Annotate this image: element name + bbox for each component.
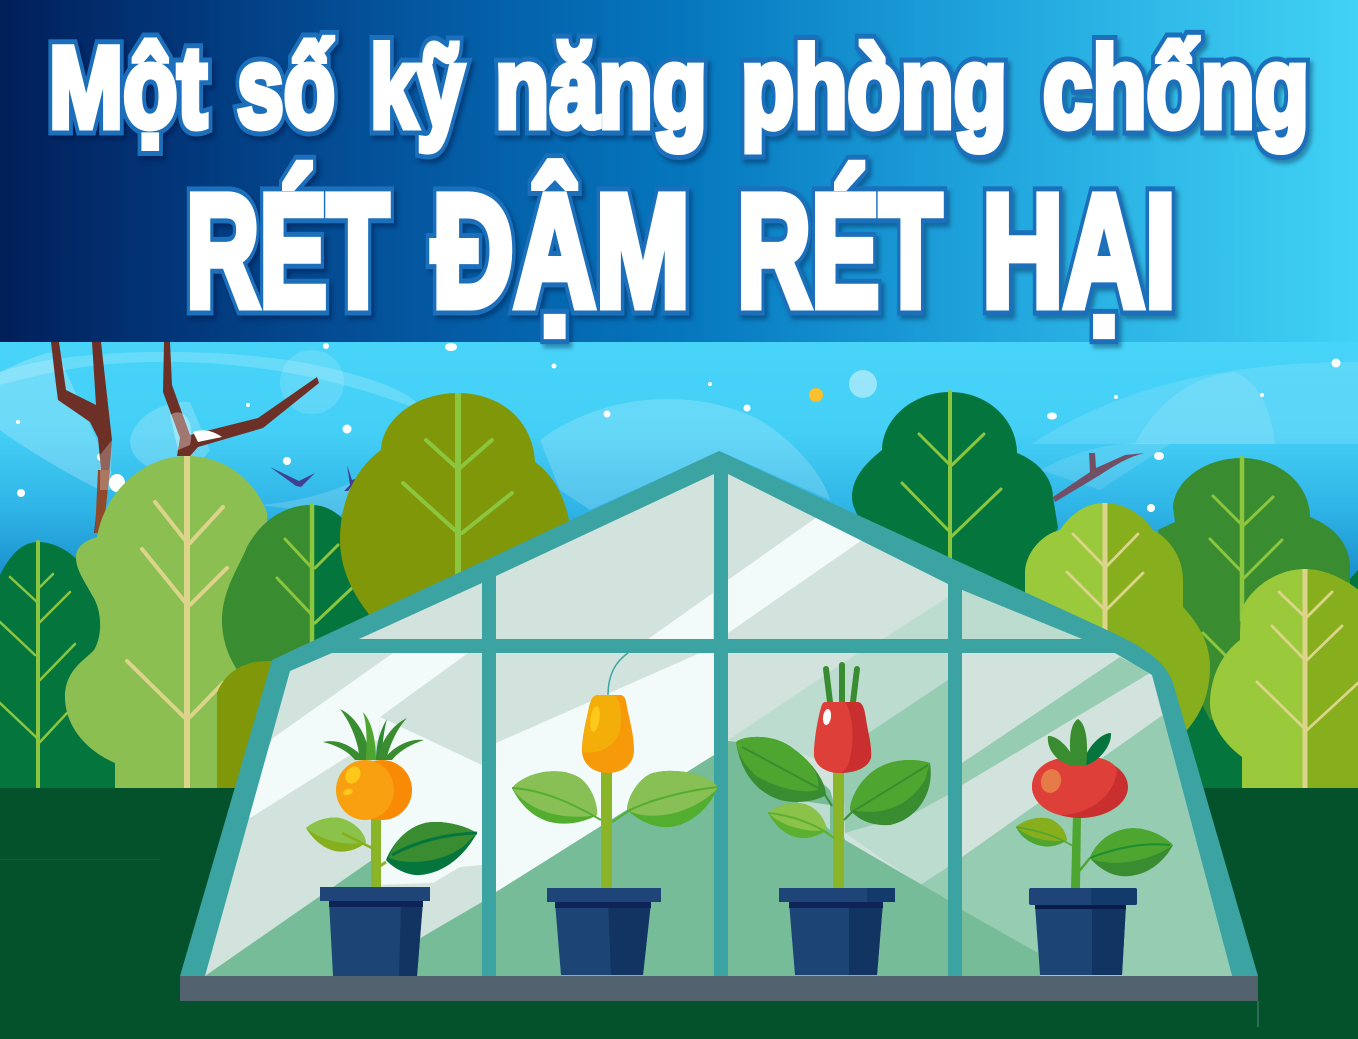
tree: lime green right middle — [1025, 503, 1210, 730]
tree: small olive bush — [217, 660, 300, 788]
glazing bars — [340, 470, 1110, 976]
orange fruit — [352, 760, 412, 820]
plant 4: tomato — [1016, 719, 1173, 975]
title line 1: phòng — [741, 24, 1007, 152]
title line 1 outline: Một — [49, 24, 207, 152]
plant 2: yellow pepper — [512, 653, 718, 975]
title line 2 outline — [186, 161, 1176, 340]
plant 1: orange — [306, 709, 477, 976]
header banner background — [0, 0, 1358, 342]
snow dots — [16, 343, 1340, 512]
title line 2 outline: HẠI — [982, 161, 1176, 340]
shelf post line — [1257, 1001, 1259, 1027]
stem — [1071, 815, 1081, 888]
title line 1 — [49, 24, 1309, 152]
title line 2 outline: ĐẬM — [432, 161, 690, 340]
title line 2 outline: RÉT — [737, 161, 942, 340]
title line 2 — [186, 161, 1176, 340]
tree: light green second — [65, 456, 270, 788]
title line 2 outline: RÉT — [186, 161, 389, 340]
tree: dark green third — [222, 505, 380, 680]
title line 1 outline: kỹ — [370, 24, 464, 152]
stem — [371, 818, 381, 888]
top leaves — [323, 709, 424, 760]
ground faint line — [0, 859, 160, 860]
left big leaf — [736, 737, 832, 806]
title line 2: ĐẬM — [432, 161, 690, 340]
title line 1: Một — [49, 24, 207, 152]
leaves top — [1048, 719, 1111, 766]
plant 3: red pepper — [736, 665, 931, 975]
right leaf — [612, 771, 718, 827]
tree: dark green far left — [0, 542, 115, 788]
tree branches left — [51, 342, 319, 533]
lower small leaf — [768, 803, 834, 838]
branches right — [1053, 453, 1145, 502]
sky background — [0, 342, 1358, 790]
title — [49, 24, 1309, 340]
title line 1: số — [237, 24, 335, 152]
pepper fruit — [582, 695, 634, 773]
icon: yellow sun dot — [809, 388, 823, 402]
title line 1 outline: năng — [495, 24, 707, 152]
title line 1 outline — [49, 24, 1309, 152]
right big leaf — [844, 760, 931, 825]
title line 2: RÉT — [186, 161, 389, 340]
red fruit — [814, 702, 871, 773]
left leaf — [1016, 818, 1073, 847]
stalk — [608, 653, 628, 695]
tree: lime green far right — [1210, 569, 1358, 788]
sky clouds and light streaks — [0, 350, 1358, 515]
left leaf — [512, 771, 601, 824]
title line 2: HẠI — [982, 161, 1176, 340]
tufts — [826, 665, 857, 702]
tree: dark green behind right — [1150, 570, 1358, 788]
left leaf — [306, 817, 372, 852]
tomato fruit — [1032, 756, 1128, 818]
stem — [601, 772, 612, 888]
pot — [779, 888, 895, 975]
greenhouse — [180, 451, 1258, 976]
pot — [547, 888, 661, 975]
title line 2: RÉT — [737, 161, 942, 340]
pot — [320, 887, 430, 976]
birds — [270, 465, 358, 491]
greenhouse frame — [180, 451, 1258, 976]
title line 1: kỹ — [370, 24, 464, 152]
glass panes — [180, 451, 1258, 976]
right leaf — [380, 822, 477, 875]
title line 1 outline: phòng — [741, 24, 1007, 152]
shelf — [180, 976, 1258, 1001]
title line 1: năng — [495, 24, 707, 152]
pot — [1029, 888, 1137, 975]
ground — [0, 788, 1358, 1039]
tree: green back right — [1158, 458, 1350, 720]
stem — [833, 770, 844, 888]
title line 1 outline: số — [237, 24, 335, 152]
tree: dark green upper right — [852, 392, 1058, 600]
tree: olive large — [340, 393, 572, 640]
right leaf — [1076, 828, 1173, 876]
